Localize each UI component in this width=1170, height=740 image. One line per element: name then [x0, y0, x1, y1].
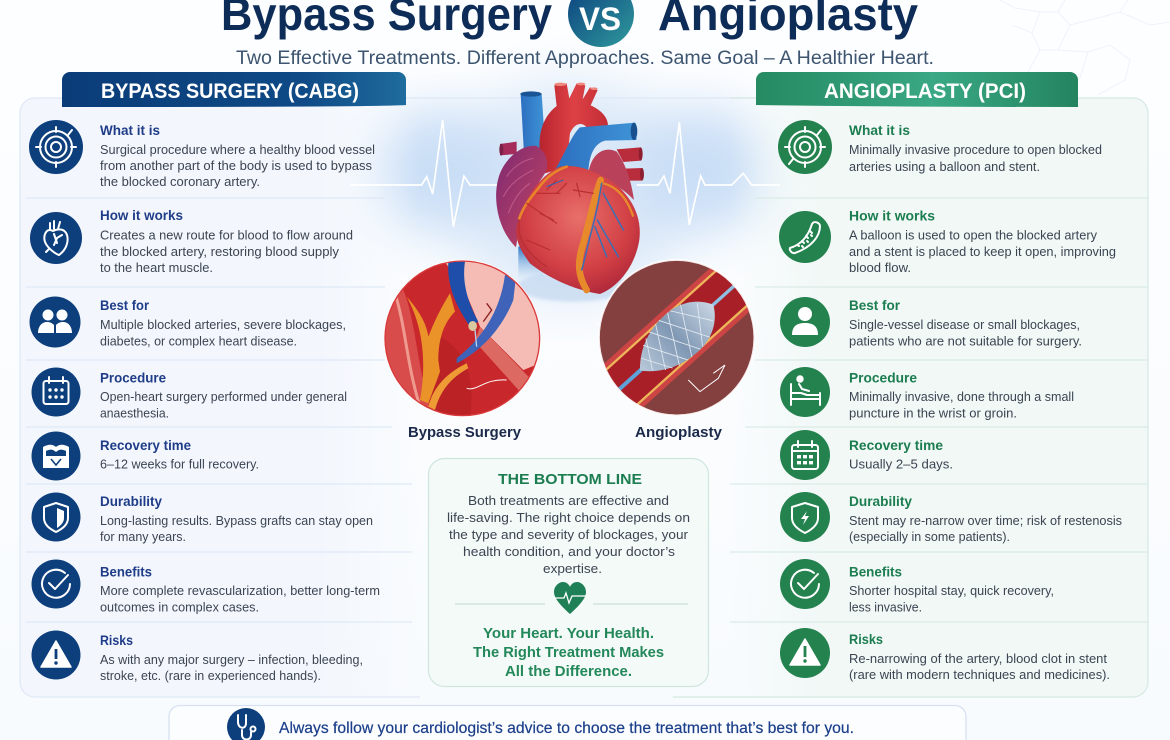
- panel: the bottom line: [428, 458, 708, 686]
- ecg line: right: [637, 122, 780, 225]
- panel: the bottom line: Both treatments are effective and: [468, 494, 669, 508]
- row: risks: Re-narrowing of the artery, blood clot in stent: [849, 652, 1108, 666]
- row: procedure: [780, 367, 1074, 420]
- row: durability: for many years.: [100, 530, 186, 544]
- row: risks: (rare with modern techniques and medicines).: [849, 668, 1110, 682]
- label: angioplasty: Angioplasty: [635, 424, 723, 441]
- row: best for: Best for: [849, 297, 901, 313]
- row: what it is: Minimally invasive procedure to open blocked: [849, 143, 1102, 157]
- row: what it is: What it is: [849, 122, 910, 138]
- row: how it works: and a stent is placed to keep it open, improving: [849, 245, 1116, 259]
- panel: the bottom line: life-saving. The right choice depends on: [447, 511, 690, 525]
- row: recovery time: Usually 2–5 days.: [849, 458, 953, 472]
- row: best for: Best for: [100, 297, 150, 313]
- panel: the bottom line: All the Difference.: [505, 664, 632, 680]
- row: recovery time: 6–12 weeks for full recovery.: [100, 458, 259, 472]
- row: recovery time: Recovery time: [849, 437, 943, 453]
- row: what it is: arteries using a balloon and stent.: [849, 160, 1040, 174]
- row: best for: [30, 296, 346, 348]
- row: how it works: How it works: [849, 208, 935, 224]
- footer callout: [169, 706, 966, 740]
- heart illustration: [496, 83, 644, 302]
- row: procedure: Procedure: [849, 370, 917, 386]
- row: procedure: puncture in the wrist or groin.: [849, 406, 1017, 420]
- row: durability: [780, 492, 1122, 544]
- panel: bypass surgery: [20, 72, 756, 697]
- row: what it is: the blocked coronary artery.: [100, 175, 260, 189]
- row: how it works: to the heart muscle.: [100, 261, 213, 275]
- panel: the bottom line: The Right Treatment Makes: [473, 645, 664, 661]
- row: benefits: [780, 559, 1054, 614]
- row: best for: diabetes, or complex heart disease.: [100, 334, 297, 348]
- row: how it works: the blocked artery, restoring blood supply: [100, 245, 340, 259]
- ecg line: left: [350, 120, 500, 227]
- row: best for: Single-vessel disease or small blockages,: [849, 318, 1080, 332]
- row: how it works: [30, 207, 353, 275]
- row: benefits: More complete revascularization, better long-term: [100, 584, 380, 598]
- row: benefits: Shorter hospital stay, quick recovery,: [849, 584, 1054, 598]
- row: risks: Risks: [100, 632, 133, 648]
- inset: angioplasty: [598, 259, 754, 416]
- banner: angioplasty: ANGIOPLASTY (PCI): [824, 80, 1026, 103]
- banner: angioplasty: [756, 72, 1078, 107]
- row: best for: [780, 297, 1082, 348]
- row: what it is: [29, 120, 375, 189]
- title: VS: [579, 1, 621, 37]
- row: benefits: Benefits: [849, 564, 902, 580]
- row: recovery time: [780, 430, 953, 480]
- icon: heart with pulse: [554, 582, 586, 614]
- row: risks: [32, 630, 363, 683]
- row: procedure: Open-heart surgery performed under general: [100, 390, 347, 404]
- row: procedure: anaesthesia.: [100, 406, 169, 420]
- panel: the bottom line: THE BOTTOM LINE: [498, 471, 642, 488]
- label: bypass surgery: Bypass Surgery: [408, 424, 522, 441]
- row: how it works: [779, 208, 1116, 275]
- panel: the bottom line: Your Heart. Your Health.: [483, 626, 654, 642]
- row: durability: (especially in some patients).: [849, 530, 1010, 544]
- icon: stethoscope: [227, 708, 265, 740]
- inset: bypass surgery: [383, 260, 543, 420]
- row: recovery time: Recovery time: [100, 437, 191, 453]
- row: benefits: less invasive.: [849, 600, 922, 614]
- row: how it works: blood flow.: [849, 261, 911, 275]
- row: procedure: Procedure: [100, 370, 166, 386]
- row: durability: Long-lasting results. Bypass grafts can stay open: [100, 514, 373, 528]
- row: risks: As with any major surgery – infection, bleeding,: [100, 653, 363, 667]
- row: durability: Durability: [100, 493, 162, 509]
- subtitle: Two Effective Treatments. Different Approaches. Same Goal – A Healthier Heart.: [236, 48, 934, 69]
- panel: angioplasty: [673, 72, 1148, 697]
- row: what it is: from another part of the body is used to bypass: [100, 159, 372, 173]
- footer callout: Always follow your cardiologist’s advice to choose the treatment that’s best for you.: [279, 720, 854, 737]
- row: benefits: [32, 560, 380, 614]
- row: how it works: A balloon is used to open the blocked artery: [849, 228, 1098, 242]
- hexagon pattern: [1000, 0, 1170, 98]
- row: best for: patients who are not suitable for surgery.: [849, 334, 1082, 348]
- row: procedure: Minimally invasive, done through a small: [849, 390, 1074, 404]
- row: what it is: What it is: [100, 122, 160, 138]
- glow behind heart: [365, 80, 775, 300]
- panel: the bottom line: expertise.: [543, 562, 602, 576]
- panel: the bottom line: the type and severity of blockages, your: [449, 528, 688, 542]
- row: benefits: outcomes in complex cases.: [100, 600, 259, 614]
- banner: bypass: BYPASS SURGERY (CABG): [101, 80, 359, 103]
- panel: the bottom line: health condition, and your doctor’s: [463, 545, 675, 559]
- row: best for: Multiple blocked arteries, severe blockages,: [100, 318, 346, 332]
- row: durability: [32, 492, 373, 544]
- row: durability: Durability: [849, 493, 912, 509]
- row: what it is: Surgical procedure where a healthy blood vessel: [100, 143, 375, 157]
- row: recovery time: [32, 432, 259, 480]
- row: benefits: Benefits: [100, 564, 152, 580]
- row: risks: stroke, etc. (rare in experienced hands).: [100, 669, 321, 683]
- banner: bypass: [62, 72, 406, 107]
- row: how it works: Creates a new route for blood to flow around: [100, 228, 353, 242]
- row: risks: Risks: [849, 631, 883, 647]
- row: how it works: How it works: [100, 207, 183, 223]
- row: durability: Stent may re-narrow over time; risk of restenosis: [849, 514, 1122, 528]
- title: [221, 0, 918, 47]
- row: procedure: [32, 368, 347, 420]
- row: what it is: [778, 120, 1102, 174]
- row: risks: [780, 628, 1110, 682]
